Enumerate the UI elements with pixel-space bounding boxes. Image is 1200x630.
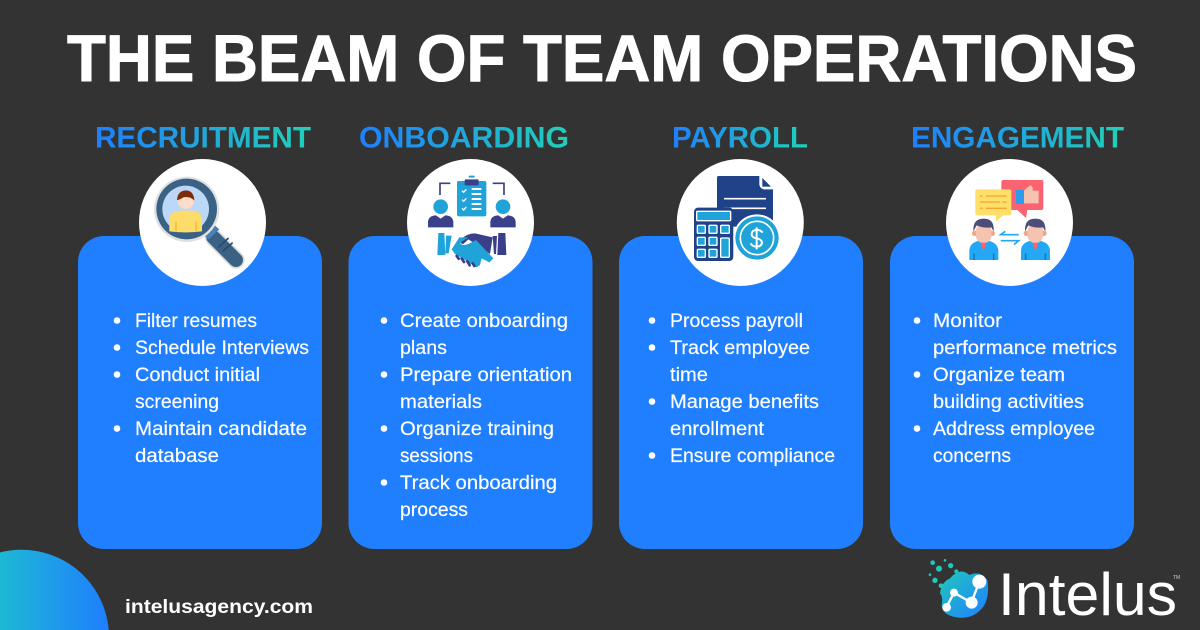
list: payroll tasks: Process payroll bbox=[670, 310, 803, 332]
list: payroll tasks: Manage benefits bbox=[670, 391, 819, 413]
card: onboarding bbox=[348, 236, 592, 549]
logo: Intelus bbox=[929, 559, 1180, 628]
list: recruitment tasks: Schedule Interviews bbox=[135, 337, 309, 359]
list: engagement tasks: building activities bbox=[933, 391, 1084, 413]
list: onboarding tasks bbox=[381, 310, 572, 521]
card: payroll bbox=[619, 236, 863, 549]
list: engagement tasks: Monitor bbox=[933, 310, 1003, 332]
list: recruitment tasks bbox=[114, 310, 309, 467]
panel: payroll bbox=[619, 122, 863, 549]
list: onboarding tasks: Organize training bbox=[400, 418, 554, 440]
icon: checklist and handshake bbox=[407, 159, 534, 286]
list: engagement tasks: performance metrics bbox=[933, 337, 1117, 359]
list: recruitment tasks: Maintain candidate bbox=[135, 418, 307, 440]
list: onboarding tasks: Create onboarding bbox=[400, 310, 568, 332]
panel: engagement bbox=[890, 122, 1134, 549]
list: payroll tasks: Track employee bbox=[670, 337, 810, 359]
list: engagement tasks: Address employee bbox=[933, 418, 1095, 440]
list: onboarding tasks: plans bbox=[400, 337, 447, 359]
list: payroll tasks: Ensure compliance bbox=[670, 445, 835, 467]
heading: onboarding: ONBOARDING bbox=[359, 122, 569, 154]
corner gradient circle bbox=[0, 550, 109, 630]
list: recruitment tasks: screening bbox=[135, 391, 219, 413]
panel: recruitment bbox=[78, 122, 322, 549]
panel: onboarding bbox=[348, 122, 592, 549]
list: recruitment tasks: Conduct initial bbox=[135, 364, 260, 386]
list: onboarding tasks: materials bbox=[400, 391, 482, 413]
website url: intelusagency.com bbox=[125, 597, 313, 618]
title: THE BEAM OF TEAM OPERATIONS bbox=[67, 21, 1137, 95]
list: onboarding tasks: process bbox=[400, 499, 468, 521]
icon: two people with speech bubbles bbox=[946, 159, 1073, 286]
list: payroll tasks: enrollment bbox=[670, 418, 765, 440]
list: payroll tasks bbox=[649, 310, 835, 467]
logo wordmark: Intelus bbox=[998, 561, 1177, 628]
list: recruitment tasks: database bbox=[135, 445, 219, 467]
heading: payroll: PAYROLL bbox=[672, 122, 808, 154]
card: engagement bbox=[890, 236, 1134, 549]
list: recruitment tasks: Filter resumes bbox=[135, 310, 257, 332]
list: engagement tasks: Organize team bbox=[933, 364, 1065, 386]
logo mark bbox=[929, 559, 988, 618]
icon: magnifying glass over candidate bbox=[139, 159, 266, 286]
list: engagement tasks: concerns bbox=[933, 445, 1011, 467]
list: payroll tasks: time bbox=[670, 364, 708, 386]
icon: calculator, document and coin bbox=[677, 159, 804, 286]
list: onboarding tasks: sessions bbox=[400, 445, 473, 467]
list: onboarding tasks: Track onboarding bbox=[400, 472, 557, 494]
trademark: TM bbox=[1173, 575, 1180, 581]
heading: recruitment: RECRUITMENT bbox=[95, 122, 311, 154]
heading: engagement: ENGAGEMENT bbox=[911, 122, 1124, 154]
list: engagement tasks bbox=[914, 310, 1117, 467]
list: onboarding tasks: Prepare orientation bbox=[400, 364, 572, 386]
card: recruitment bbox=[78, 236, 322, 549]
